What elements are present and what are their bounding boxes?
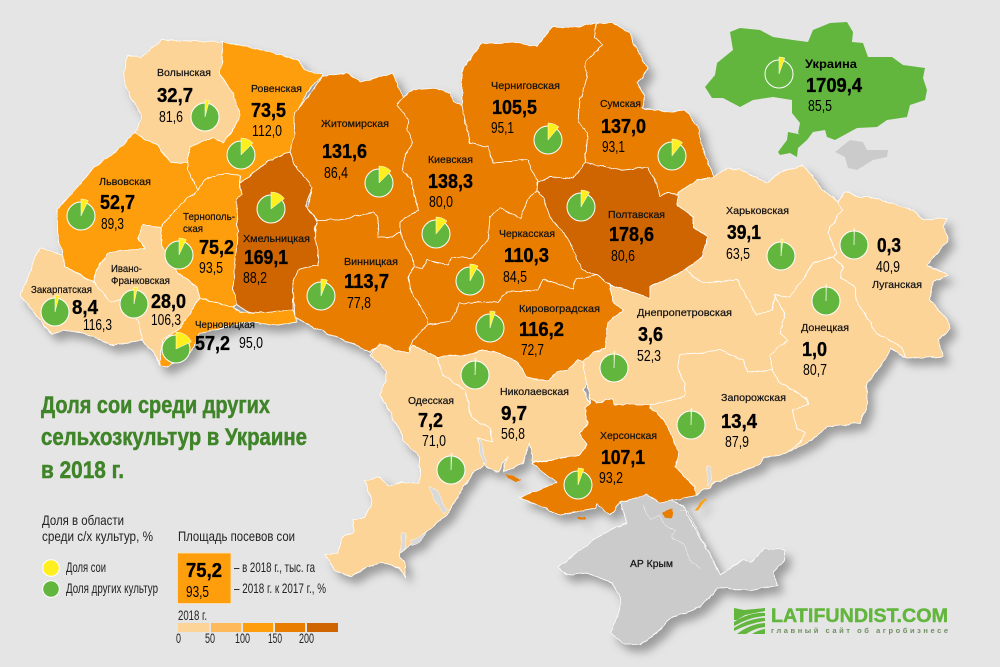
pie: Zhytomyr: [365, 166, 393, 197]
data: Ivano-Frankivsk: [111, 263, 186, 329]
data: Cherkasy: 84,5: [503, 269, 527, 286]
pie: Chernivtsi: [162, 332, 191, 363]
region: AR Crimea: [558, 495, 785, 645]
label: AR Crimea: АР Крым: [630, 558, 673, 570]
pie: Ternopil: [165, 238, 193, 269]
data: Zakarpattia: [31, 284, 112, 334]
data: Odesa: 71,0: [422, 433, 446, 450]
small islands and spits: [400, 438, 712, 552]
data: Kherson: 93,2: [599, 470, 623, 487]
data: Chernivtsi: [162, 319, 263, 363]
region: Mykolaiv: [437, 350, 590, 472]
data: Rivne: [227, 83, 302, 169]
data: Ivano-Frankivsk: 106,3: [151, 312, 181, 329]
Arabat spit and Syvash outlines: [643, 505, 718, 572]
data: Kyiv: Киевская: [428, 154, 473, 166]
inset: Ukraine total: [705, 22, 927, 170]
legend: sown area of soy: [178, 528, 326, 604]
data: Zaporizhzhia: 13,4: [721, 410, 758, 433]
title: [41, 392, 307, 484]
data: Chernivtsi: Черновицкая: [195, 319, 255, 331]
data: Vinnytsia: 113,7: [344, 270, 389, 293]
data: Dnipropetrovsk: 3,6: [638, 323, 663, 346]
pie: Lviv: [67, 199, 95, 230]
data: Ternopil: 93,5: [199, 260, 223, 277]
data: Volyn: Волынская: [157, 67, 211, 79]
data: Vinnytsia: 77,8: [347, 295, 371, 312]
data: Vinnytsia: [307, 256, 398, 312]
pie: Poltava: [567, 190, 595, 221]
data: Cherkasy: [456, 228, 555, 295]
legend: share of crops: Доля в области: [42, 512, 124, 528]
inset map: Crimea: [835, 140, 888, 170]
data: Poltava: 80,6: [611, 248, 635, 265]
legend: sown area of soy: – в 2018 г., тыс. га: [234, 559, 315, 575]
pie: Rivne: [227, 138, 255, 169]
region: Kirovohrad: [408, 275, 623, 382]
region: Sumy: [578, 23, 713, 197]
pie: Cherkasy: [456, 264, 484, 295]
data: Ternopil: Тернополь-: [183, 211, 235, 223]
data: Ternopil: [165, 211, 235, 277]
pie: Vinnytsia: [307, 279, 335, 310]
value: Ukraine area: 1709,4: [806, 74, 863, 97]
region: Lviv: [57, 133, 198, 282]
title: в 2018 г.: [41, 457, 124, 484]
data: Khmelnytskyi: Хмельницкая: [243, 233, 310, 245]
data: Dnipropetrovsk: Днепропетровская: [637, 307, 732, 319]
data: Chernihiv: 95,1: [491, 120, 514, 137]
label: Ukraine: Украина: [805, 57, 857, 71]
pie: Zaporizhzhia: [677, 408, 705, 439]
legend: share of crops: Доля других культур: [66, 580, 158, 596]
data: Chernihiv: Черниговская: [491, 80, 560, 92]
region: Chernihiv: [462, 23, 603, 182]
legend: colour scale: [176, 607, 338, 646]
data: Odesa: Одесская: [408, 395, 454, 407]
title: Доля сои среди других: [41, 392, 270, 419]
data: Ivano-Frankivsk: Ивано-: [111, 263, 142, 275]
data: Donetsk: [801, 284, 849, 379]
data: Luhansk: 0,3: [877, 234, 901, 257]
data: Sumy: 137,0: [601, 115, 646, 138]
legend icon: other crops share: [43, 581, 59, 597]
data: Ivano-Frankivsk: 28,0: [151, 290, 186, 313]
inset map: Ukraine mainland: [705, 22, 927, 140]
data: Chernivtsi: 95,0: [239, 335, 263, 352]
data: Kharkiv: Харьковская: [726, 205, 789, 217]
data: Lviv: [67, 176, 151, 233]
legend: colour scale: 200: [299, 630, 314, 646]
data: Rivne: 73,5: [251, 99, 286, 122]
legend: colour scale: 2018 г.: [178, 607, 207, 623]
data: Sumy: [600, 98, 686, 170]
data: Kyiv: 80,0: [429, 194, 453, 211]
region: Ternopil: [161, 173, 242, 307]
data: Kharkiv: 63,5: [726, 246, 750, 263]
legend: sown area of soy: 93,5: [186, 584, 209, 601]
legend: colour scale: 50: [205, 630, 215, 646]
data: Lviv: 89,3: [101, 216, 124, 233]
region: Zakarpattia: [20, 248, 143, 345]
pie: Kirovohrad: [476, 311, 504, 342]
region: Cherkasy: [408, 190, 597, 325]
legend sample box: [178, 553, 231, 604]
region: Kherson: [520, 398, 697, 515]
pie: Donetsk: [812, 284, 840, 315]
title: сельхозкультур в Украине: [41, 424, 307, 451]
region: Donetsk: [770, 257, 905, 453]
data: Ternopil: 75,2: [199, 236, 234, 259]
region: Chernivtsi: [159, 298, 297, 367]
data: Kharkiv: 39,1: [727, 221, 761, 244]
data: Luhansk: 40,9: [876, 259, 900, 276]
data: Ternopil: ская: [183, 223, 203, 235]
data: Dnipropetrovsk: [600, 307, 732, 382]
data: Poltava: 178,6: [609, 223, 654, 246]
region: Volyn: [123, 40, 240, 163]
data: Khmelnytskyi: 169,1: [244, 246, 288, 269]
pie: Khmelnytskyi: [257, 192, 285, 223]
data: Zakarpattia: 8,4: [72, 296, 99, 319]
data: Lviv: 52,7: [100, 191, 135, 214]
data: Cherkasy: Черкасская: [499, 228, 555, 240]
data: Kharkiv: [726, 205, 795, 270]
data: Odesa: [408, 395, 465, 484]
pie: Kharkiv: [767, 239, 795, 270]
data: Khmelnytskyi: [243, 192, 310, 287]
data: Kirovohrad: 72,7: [521, 342, 544, 359]
legend: colour scale: 100: [235, 630, 250, 646]
region: Rivne: [188, 42, 323, 190]
legend: colour scale: 0: [176, 630, 181, 646]
region: Poltava: [537, 163, 708, 298]
region: Kharkiv: [677, 165, 842, 315]
data: Volyn: 32,7: [157, 84, 193, 107]
data: Kherson: [564, 430, 657, 499]
data: Mykolaiv: Николаевская: [500, 386, 569, 398]
data: Rivne: Ровенская: [251, 83, 302, 95]
data: Khmelnytskyi: 88,2: [243, 270, 267, 287]
data: Zhytomyr: 131,6: [322, 140, 367, 163]
value: Ukraine change: 85,5: [808, 98, 832, 115]
data: Rivne: 112,0: [252, 123, 282, 140]
data: Mykolaiv: 56,8: [501, 426, 525, 443]
data: Sumy: Сумская: [600, 98, 641, 110]
data: Poltava: [567, 190, 665, 265]
region: Luhansk: [828, 192, 950, 358]
data: Kherson: 107,1: [601, 446, 645, 469]
pie: Luhansk: [840, 228, 868, 259]
region: Odesa: [325, 343, 493, 577]
data: Donetsk: Донецкая: [801, 322, 849, 334]
region: Zhytomyr: [290, 73, 418, 237]
region: Zaporizhzhia: [650, 350, 808, 495]
legend: share of crops: Доля сои: [66, 559, 106, 575]
pie: Mykolaiv: [461, 358, 489, 389]
data: Zaporizhzhia: 87,9: [725, 434, 749, 451]
pie: Volyn: [191, 100, 219, 131]
pie: Kherson: [564, 468, 592, 499]
data: Mykolaiv: 9,7: [501, 402, 527, 425]
data: Kyiv: 138,3: [428, 170, 473, 193]
data: Vinnytsia: Винницкая: [344, 256, 398, 268]
pie: Chernihiv: [534, 123, 562, 154]
data: Volyn: [157, 67, 219, 131]
data: Cherkasy: 110,3: [504, 244, 549, 267]
data: Kirovohrad: [476, 303, 600, 359]
legend: share of crops: среди с/х культур, %: [42, 528, 153, 544]
data: Volyn: 81,6: [159, 109, 183, 126]
data: Odesa: 7,2: [418, 409, 443, 432]
legend: colour scale: 150: [268, 630, 282, 646]
inset map: Odesa part: [778, 132, 807, 157]
legend: sown area of soy: 75,2: [186, 559, 222, 582]
data: Mykolaiv: [461, 358, 569, 443]
pie: Ukraine: [765, 57, 793, 88]
data: Donetsk: 1,0: [802, 338, 827, 361]
data: Luhansk: Луганская: [872, 279, 922, 291]
pie: Dnipropetrovsk: [600, 351, 628, 382]
data: Kirovohrad: 116,2: [519, 318, 564, 341]
legend: sown area of soy: Площадь посевов сои: [178, 528, 295, 544]
data: Ivano-Frankivsk: Франковская: [111, 275, 170, 287]
logo wordmark: LATIFUNDIST.COM: [771, 606, 948, 627]
data: Zhytomyr: Житомирская: [321, 118, 389, 130]
data: Zhytomyr: 86,4: [324, 165, 348, 182]
data: Dnipropetrovsk: 52,3: [637, 348, 661, 365]
region: Khmelnytskyi: [233, 152, 318, 313]
legend: share of crops: [42, 512, 158, 597]
data: Chernihiv: [491, 80, 562, 154]
logo icon: [734, 608, 765, 634]
data: Zaporizhzhia: [677, 392, 786, 451]
data: Lviv: Львовская: [99, 176, 151, 188]
pie: Sumy: [658, 139, 686, 170]
logo tagline: главный сайт об агробизнесе: [771, 626, 948, 635]
pie: Zakarpattia: [41, 295, 69, 326]
data: Zakarpattia: 116,3: [83, 317, 112, 334]
pie: Ivano-Frankivsk: [120, 287, 148, 318]
logo: Latifundist: [734, 606, 948, 635]
legend: sown area of soy: – 2018 г. к 2017 г., %: [234, 580, 326, 596]
data: Poltava: Полтавская: [608, 209, 665, 221]
pie: Kyiv: [422, 217, 450, 248]
data: Sumy: 93,1: [602, 139, 625, 156]
data: Zaporizhzhia: Запорожская: [721, 392, 786, 404]
pie: Odesa: [437, 453, 465, 484]
region: Vinnytsia: [293, 212, 428, 353]
data: Chernivtsi: 57,2: [195, 332, 230, 355]
data: Zhytomyr: [321, 118, 393, 197]
data: Kirovohrad: Кировоградская: [519, 303, 600, 315]
data: Kyiv: [422, 154, 473, 248]
region: Dnipropetrovsk: [583, 270, 788, 405]
data: Zakarpattia: Закарпатская: [31, 284, 92, 296]
data: Luhansk: [840, 228, 922, 291]
data: Chernihiv: 105,5: [492, 96, 537, 119]
region: Ivano-Frankivsk: [94, 225, 200, 365]
region: Kyiv: [397, 88, 537, 268]
data: Kherson: Херсонская: [600, 430, 657, 442]
legend icon: soy share: [43, 560, 59, 576]
data: Donetsk: 80,7: [803, 362, 827, 379]
